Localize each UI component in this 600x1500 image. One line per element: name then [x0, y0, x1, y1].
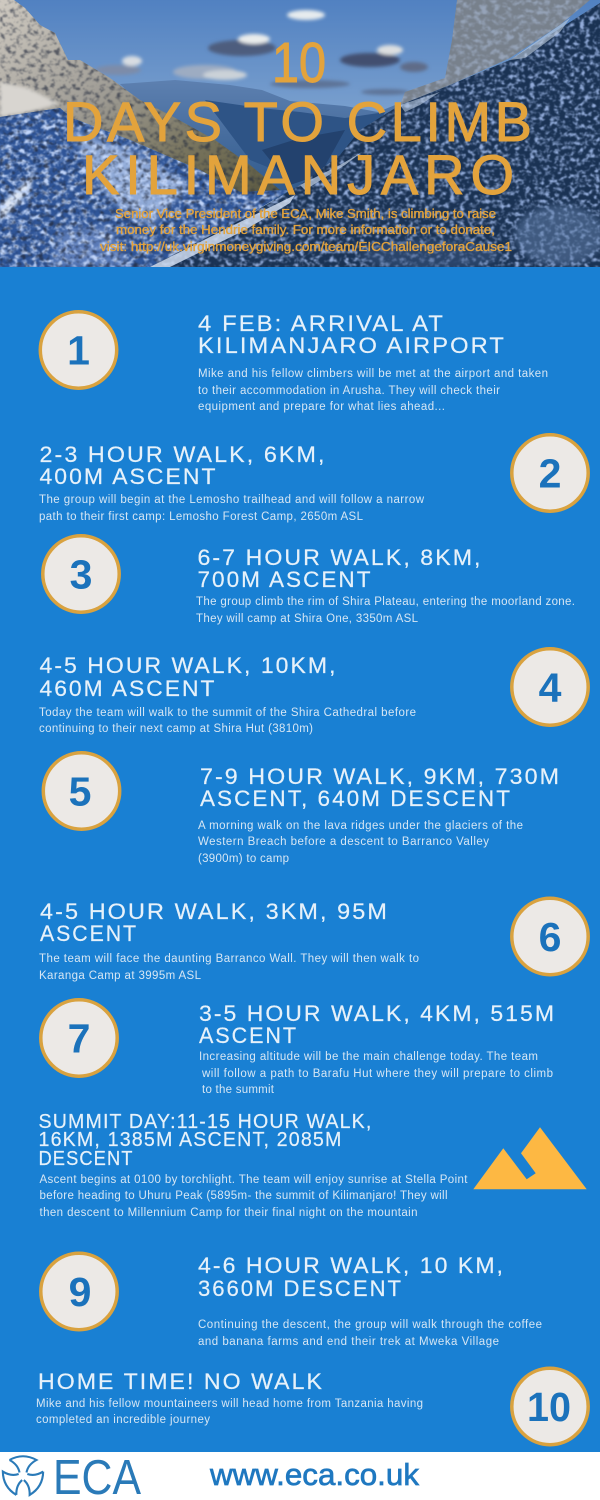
body 2: The group will begin at the Lemosho trailhead and will follow a narrow [39, 494, 425, 506]
heading 5 [200, 764, 561, 811]
header photo: snowy mountain valley [0, 0, 600, 271]
heading 7 [199, 1001, 556, 1048]
intro text: money for the Hendrie family. For more information or to donate, [116, 223, 495, 237]
footer website: www.eca.co.uk [209, 1457, 419, 1492]
icon: mountain [473, 1127, 587, 1189]
body 1: equipment and prepare for what lies ahead... [198, 401, 445, 413]
heading 4: 460M ASCENT [40, 676, 216, 701]
heading 6: ASCENT [40, 921, 138, 946]
number badge 10 [512, 1368, 588, 1445]
body 7: to the summit [202, 1084, 275, 1096]
number badge 5 [43, 753, 120, 829]
heading 3: 700M ASCENT [198, 567, 372, 592]
intro text: visit: http://uk.virginmoneygiving.com/team/EICChallengeforaCause1 [100, 240, 512, 254]
number badge 2 [512, 435, 588, 511]
number badge 1 [40, 312, 117, 388]
main blue panel [0, 267, 600, 1452]
number badge 6: 6 [539, 914, 561, 960]
body 10: completed an incredible journey [36, 1414, 210, 1426]
body 9 [198, 1319, 542, 1348]
body 5: A morning walk on the lava ridges under the glaciers of the [198, 820, 523, 832]
heading 10: HOME TIME! NO WALK [38, 1369, 324, 1394]
heading 9: 3660M DESCENT [198, 1276, 403, 1301]
heading 6: 4-5 HOUR WALK, 3KM, 95M [40, 899, 389, 924]
body 10 [36, 1398, 423, 1426]
heading 8: DESCENT [38, 1147, 134, 1170]
body 3 [196, 596, 575, 625]
heading 1 [198, 311, 506, 358]
step 4 [39, 649, 588, 735]
title [63, 31, 532, 206]
body 6 [39, 953, 419, 982]
heading 4: 4-5 HOUR WALK, 10KM, [40, 653, 337, 678]
heading 3: 6-7 HOUR WALK, 8KM, [198, 545, 482, 570]
number badge 7: 7 [68, 1016, 90, 1062]
heading 8: 16KM, 1385M ASCENT, 2085M [38, 1128, 342, 1151]
step 2 [39, 435, 588, 523]
step 7 [41, 1000, 556, 1096]
body 4: Today the team will walk to the summit of the Shira Cathedral before [39, 707, 416, 719]
number badge 3 [43, 536, 119, 612]
step 3 [43, 536, 575, 625]
step 1 [40, 311, 548, 413]
body 8: Ascent begins at 0100 by torchlight. The team will enjoy sunrise at Stella Point [40, 1174, 468, 1186]
heading 8: SUMMIT DAY:11-15 HOUR WALK, [38, 1110, 372, 1133]
step 10 [36, 1368, 588, 1445]
number badge 9 [41, 1253, 117, 1330]
number badge 10: 10 [527, 1384, 571, 1430]
number badge 1: 1 [67, 328, 90, 374]
body 7: Increasing altitude will be the main challenge today. The team [199, 1051, 538, 1063]
body 5: Western Breach before a descent to Barranco Valley [198, 836, 489, 848]
heading 6 [40, 899, 389, 946]
heading 2: 2-3 HOUR WALK, 6KM, [40, 442, 327, 467]
body 1: to their accommodation in Arusha. They will check their [198, 385, 500, 397]
heading 7: 3-5 HOUR WALK, 4KM, 515M [199, 1001, 556, 1026]
heading 8 [38, 1110, 372, 1170]
logo: ECA emblem [0, 1456, 46, 1497]
body 7 [199, 1051, 553, 1096]
number badge 6 [512, 898, 588, 975]
step 9 [41, 1253, 542, 1348]
body 6: Karanga Camp at 3995m ASL [39, 970, 202, 982]
title: DAYS TO CLIMB [63, 90, 532, 153]
heading 9: 4-6 HOUR WALK, 10 KM, [198, 1253, 505, 1278]
body 9: and banana farms and end their trek at Mweka Village [198, 1336, 499, 1348]
heading 1: 4 FEB: ARRIVAL AT [198, 311, 445, 336]
body 5: (3900m) to camp [198, 853, 289, 865]
intro text: Senior Vice President of the ECA, Mike Smith, is climbing to raise [115, 207, 496, 221]
body 3: The group climb the rim of Shira Plateau, entering the moorland zone. [196, 596, 575, 608]
step 8: summit day [38, 1110, 587, 1219]
body 6: The team will face the daunting Barranco Wall. They will then walk to [39, 953, 419, 965]
body 8: before heading to Uhuru Peak (5895m- the summit of Kilimanjaro! They will [40, 1190, 448, 1202]
footer band [0, 1452, 600, 1500]
body 8 [40, 1174, 468, 1219]
number badge 4 [512, 649, 588, 725]
heading 3 [198, 545, 482, 592]
heading 9 [198, 1253, 505, 1301]
body 9: Continuing the descent, the group will walk through the coffee [198, 1319, 542, 1331]
intro text [100, 207, 512, 254]
body 4: continuing to their next camp at Shira Hut (3810m) [39, 723, 313, 735]
number badge 3: 3 [70, 552, 92, 598]
heading 2 [40, 442, 327, 489]
heading 5: 7-9 HOUR WALK, 9KM, 730M [200, 764, 561, 789]
body 3: They will camp at Shira One, 3350m ASL [196, 613, 419, 625]
number badge 9: 9 [69, 1269, 91, 1315]
body 5 [198, 820, 523, 865]
body 2 [39, 494, 425, 523]
number badge 5: 5 [69, 768, 91, 814]
number badge 2: 2 [539, 450, 561, 496]
title: KILIMANJARO [82, 143, 514, 206]
number badge 7 [41, 1000, 117, 1076]
heading 5: ASCENT, 640M DESCENT [200, 786, 512, 811]
title: 10 [272, 31, 326, 95]
number badge 4: 4 [539, 664, 562, 710]
heading 1: KILIMANJARO AIRPORT [198, 333, 506, 358]
heading 2: 400M ASCENT [40, 464, 218, 489]
body 8: then descent to Millennium Camp for their final night on the mountain [40, 1207, 418, 1219]
body 7: will follow a path to Barafu Hut where they will prepare to climb [201, 1068, 553, 1080]
step 5 [43, 753, 561, 865]
body 10: Mike and his fellow mountaineers will head home from Tanzania having [36, 1398, 423, 1410]
step 6 [39, 898, 588, 982]
body 4 [39, 707, 416, 735]
body 1: Mike and his fellow climbers will be met at the airport and taken [198, 368, 548, 380]
heading 4 [40, 653, 337, 701]
heading 7: ASCENT [199, 1023, 298, 1048]
body 1 [198, 368, 548, 413]
body 2: path to their first camp: Lemosho Forest Camp, 2650m ASL [39, 511, 364, 523]
